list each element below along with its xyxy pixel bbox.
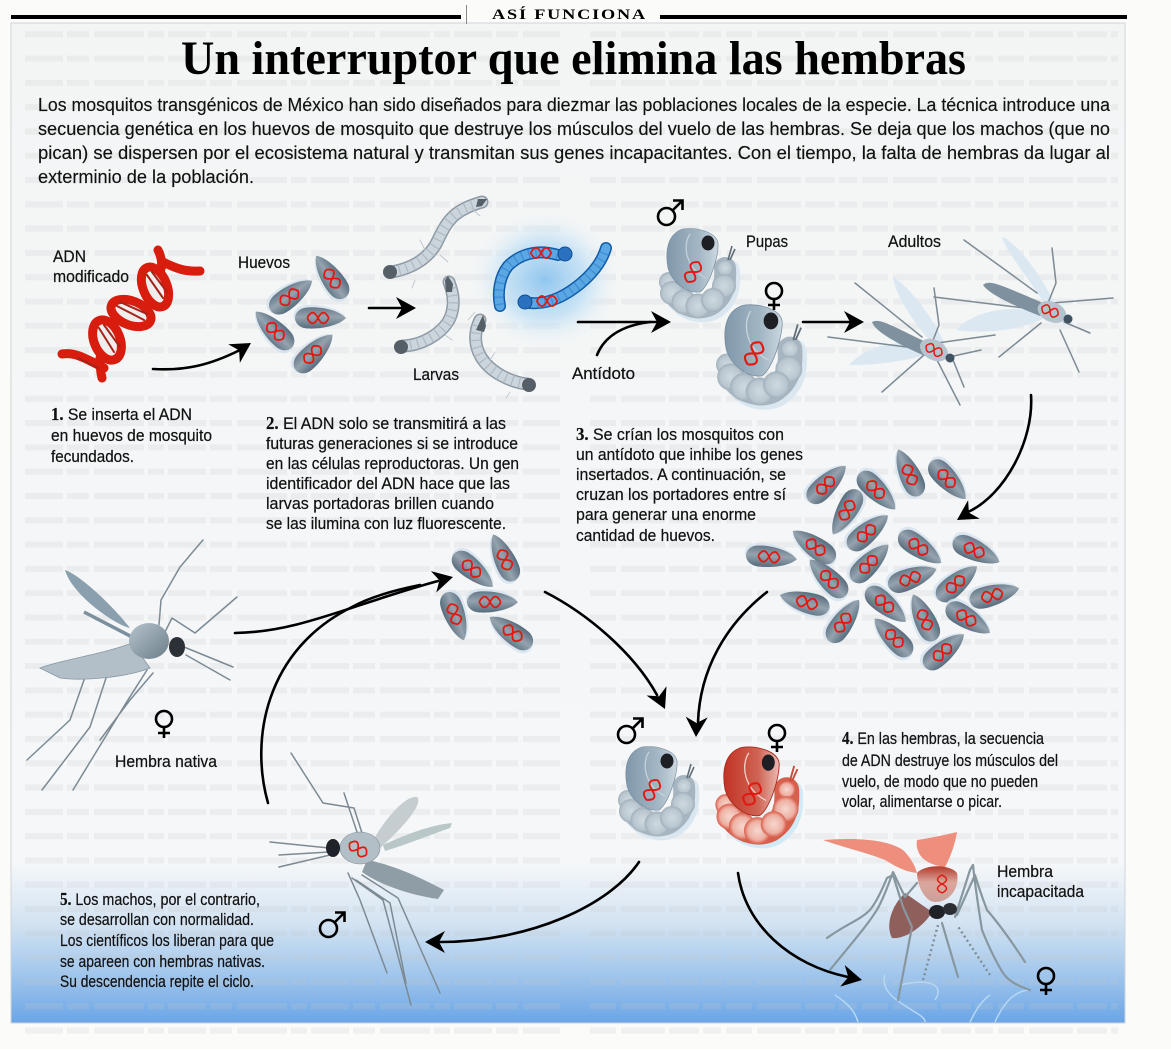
arrow: adults to egg mass <box>951 395 1031 529</box>
icon: male symbol <box>320 912 344 937</box>
icon: red DNA helix <box>62 250 200 378</box>
step 3 text: insertados. A continuación, se <box>576 465 786 484</box>
water ripples <box>835 975 1028 1022</box>
title: Un interruptor que elimina las hembras <box>181 32 966 85</box>
step 3 text: un antídoto que inhibe los genes <box>576 445 803 464</box>
arrow: larvae to pupae <box>578 311 671 333</box>
icon: female symbol <box>766 283 782 310</box>
step 4 text <box>842 728 1058 811</box>
step 2 text: larvas portadoras brillen cuando <box>266 494 494 513</box>
arrow: egg mass to pupae <box>685 592 767 737</box>
step 4 text: volar, alimentarse o picar. <box>842 792 1002 811</box>
label: ADN modificado <box>53 247 129 286</box>
released male mosquito <box>270 753 452 1005</box>
arrow: pupae to adults <box>803 311 864 333</box>
pupa male <box>618 747 695 836</box>
step 5 text <box>60 889 274 991</box>
adult mosquito 2 <box>934 237 1113 372</box>
step 2 text: 2. El ADN solo se transmitirá a las <box>266 413 506 433</box>
intro text: pican) se dispersen por el ecosistema natural y transmitan sus genes incapacitantes. Con el tiempo, la falta de hembras da lugar al <box>38 143 1110 163</box>
glowing larvae <box>471 212 619 348</box>
adult mosquito 1 <box>828 277 995 405</box>
label: Antídoto: Antídoto <box>572 364 635 383</box>
intro text: exterminio de la población. <box>38 167 254 187</box>
step 3 text <box>576 424 803 545</box>
label: Larvas: Larvas <box>413 365 459 384</box>
arrow: eggs to male pupa <box>545 592 675 714</box>
step 3 text: cantidad de huevos. <box>576 526 715 545</box>
step 2 text: futuras generaciones si se introduce <box>266 434 518 453</box>
label: Pupas: Pupas <box>746 232 788 251</box>
label: Hembra nativa: Hembra nativa <box>115 752 217 771</box>
label: ADN modificado: ADN <box>53 247 86 266</box>
label: Hembra incapacitada: incapacitada <box>997 882 1084 901</box>
label: Huevos: Huevos <box>238 253 290 272</box>
step 1 text: fecundados. <box>51 447 134 466</box>
pupa red female <box>715 747 799 844</box>
larvae <box>383 199 536 398</box>
hembra incapacitada mosquito <box>823 832 1030 1000</box>
hembra nativa mosquito <box>27 540 237 790</box>
step 2 text: identificador del ADN hace que las <box>266 474 510 493</box>
step 2 text: se las ilumina con luz fluorescente. <box>266 514 506 533</box>
step 3 text: para generar una enorme <box>576 505 756 524</box>
label: Adultos: Adultos <box>888 232 941 251</box>
step 1 text: en huevos de mosquito <box>51 426 212 445</box>
pupa male <box>659 229 736 318</box>
arrow: red pupa to disabled female <box>738 873 864 991</box>
arrow: eggs to larvae <box>369 297 416 319</box>
arrow: DNA to eggs <box>153 334 257 369</box>
intro text: Los mosquitos transgénicos de México han sido diseñados para diezmar las poblaciones locales de la especie. La técnica introduce una <box>38 95 1111 115</box>
intro text <box>38 95 1111 187</box>
arrow: male to eggs <box>261 585 420 803</box>
step 5 text: se apareen con hembras nativas. <box>60 952 265 971</box>
step 5 text: Su descendencia repite el ciclo. <box>60 972 254 991</box>
step 1 text <box>51 404 212 466</box>
label: Hembra incapacitada <box>997 862 1084 901</box>
arrow: antidote <box>597 322 650 355</box>
header rule <box>11 5 1127 24</box>
step 3 text: cruzan los portadores entre sí <box>576 485 786 504</box>
icon: male symbol <box>658 200 682 225</box>
arrow: pupa male to released male <box>425 862 639 953</box>
step 4 text: de ADN destruye los músculos del <box>842 751 1058 770</box>
step 2 text: en las células reproductoras. Un gen <box>266 454 519 473</box>
egg mass <box>744 445 1022 676</box>
section label: ASÍ FUNCIONA <box>492 6 647 23</box>
icon: female symbol <box>1038 968 1054 995</box>
arrow: native female to eggs <box>235 566 456 633</box>
intro text: secuencia genética en los huevos de mosquito que destruye los músculos del vuelo de las hembras. Se deja que los machos (que no <box>38 119 1110 139</box>
eggs group 2 <box>436 530 539 658</box>
step 4 text: vuelo, de modo que no pueden <box>842 772 1038 791</box>
eggs group 1 <box>246 250 355 379</box>
icon: male symbol <box>618 718 642 743</box>
icon: female symbol <box>156 711 172 738</box>
pupa female <box>716 305 802 406</box>
step 5 text: Los científicos los liberan para que <box>60 931 274 950</box>
step 3 text: 3. Se crían los mosquitos con <box>576 424 784 444</box>
step 4 text: 4. En las hembras, la secuencia <box>842 728 1044 748</box>
label: Hembra incapacitada: Hembra <box>997 862 1053 881</box>
step 5 text: 5. Los machos, por el contrario, <box>60 889 260 909</box>
step 1 text: 1. Se inserta el ADN <box>51 404 192 424</box>
icon: female symbol <box>769 725 785 752</box>
label: ADN modificado: modificado <box>53 267 129 286</box>
step 5 text: se desarrollan con normalidad. <box>60 910 254 929</box>
step 2 text <box>266 413 519 533</box>
